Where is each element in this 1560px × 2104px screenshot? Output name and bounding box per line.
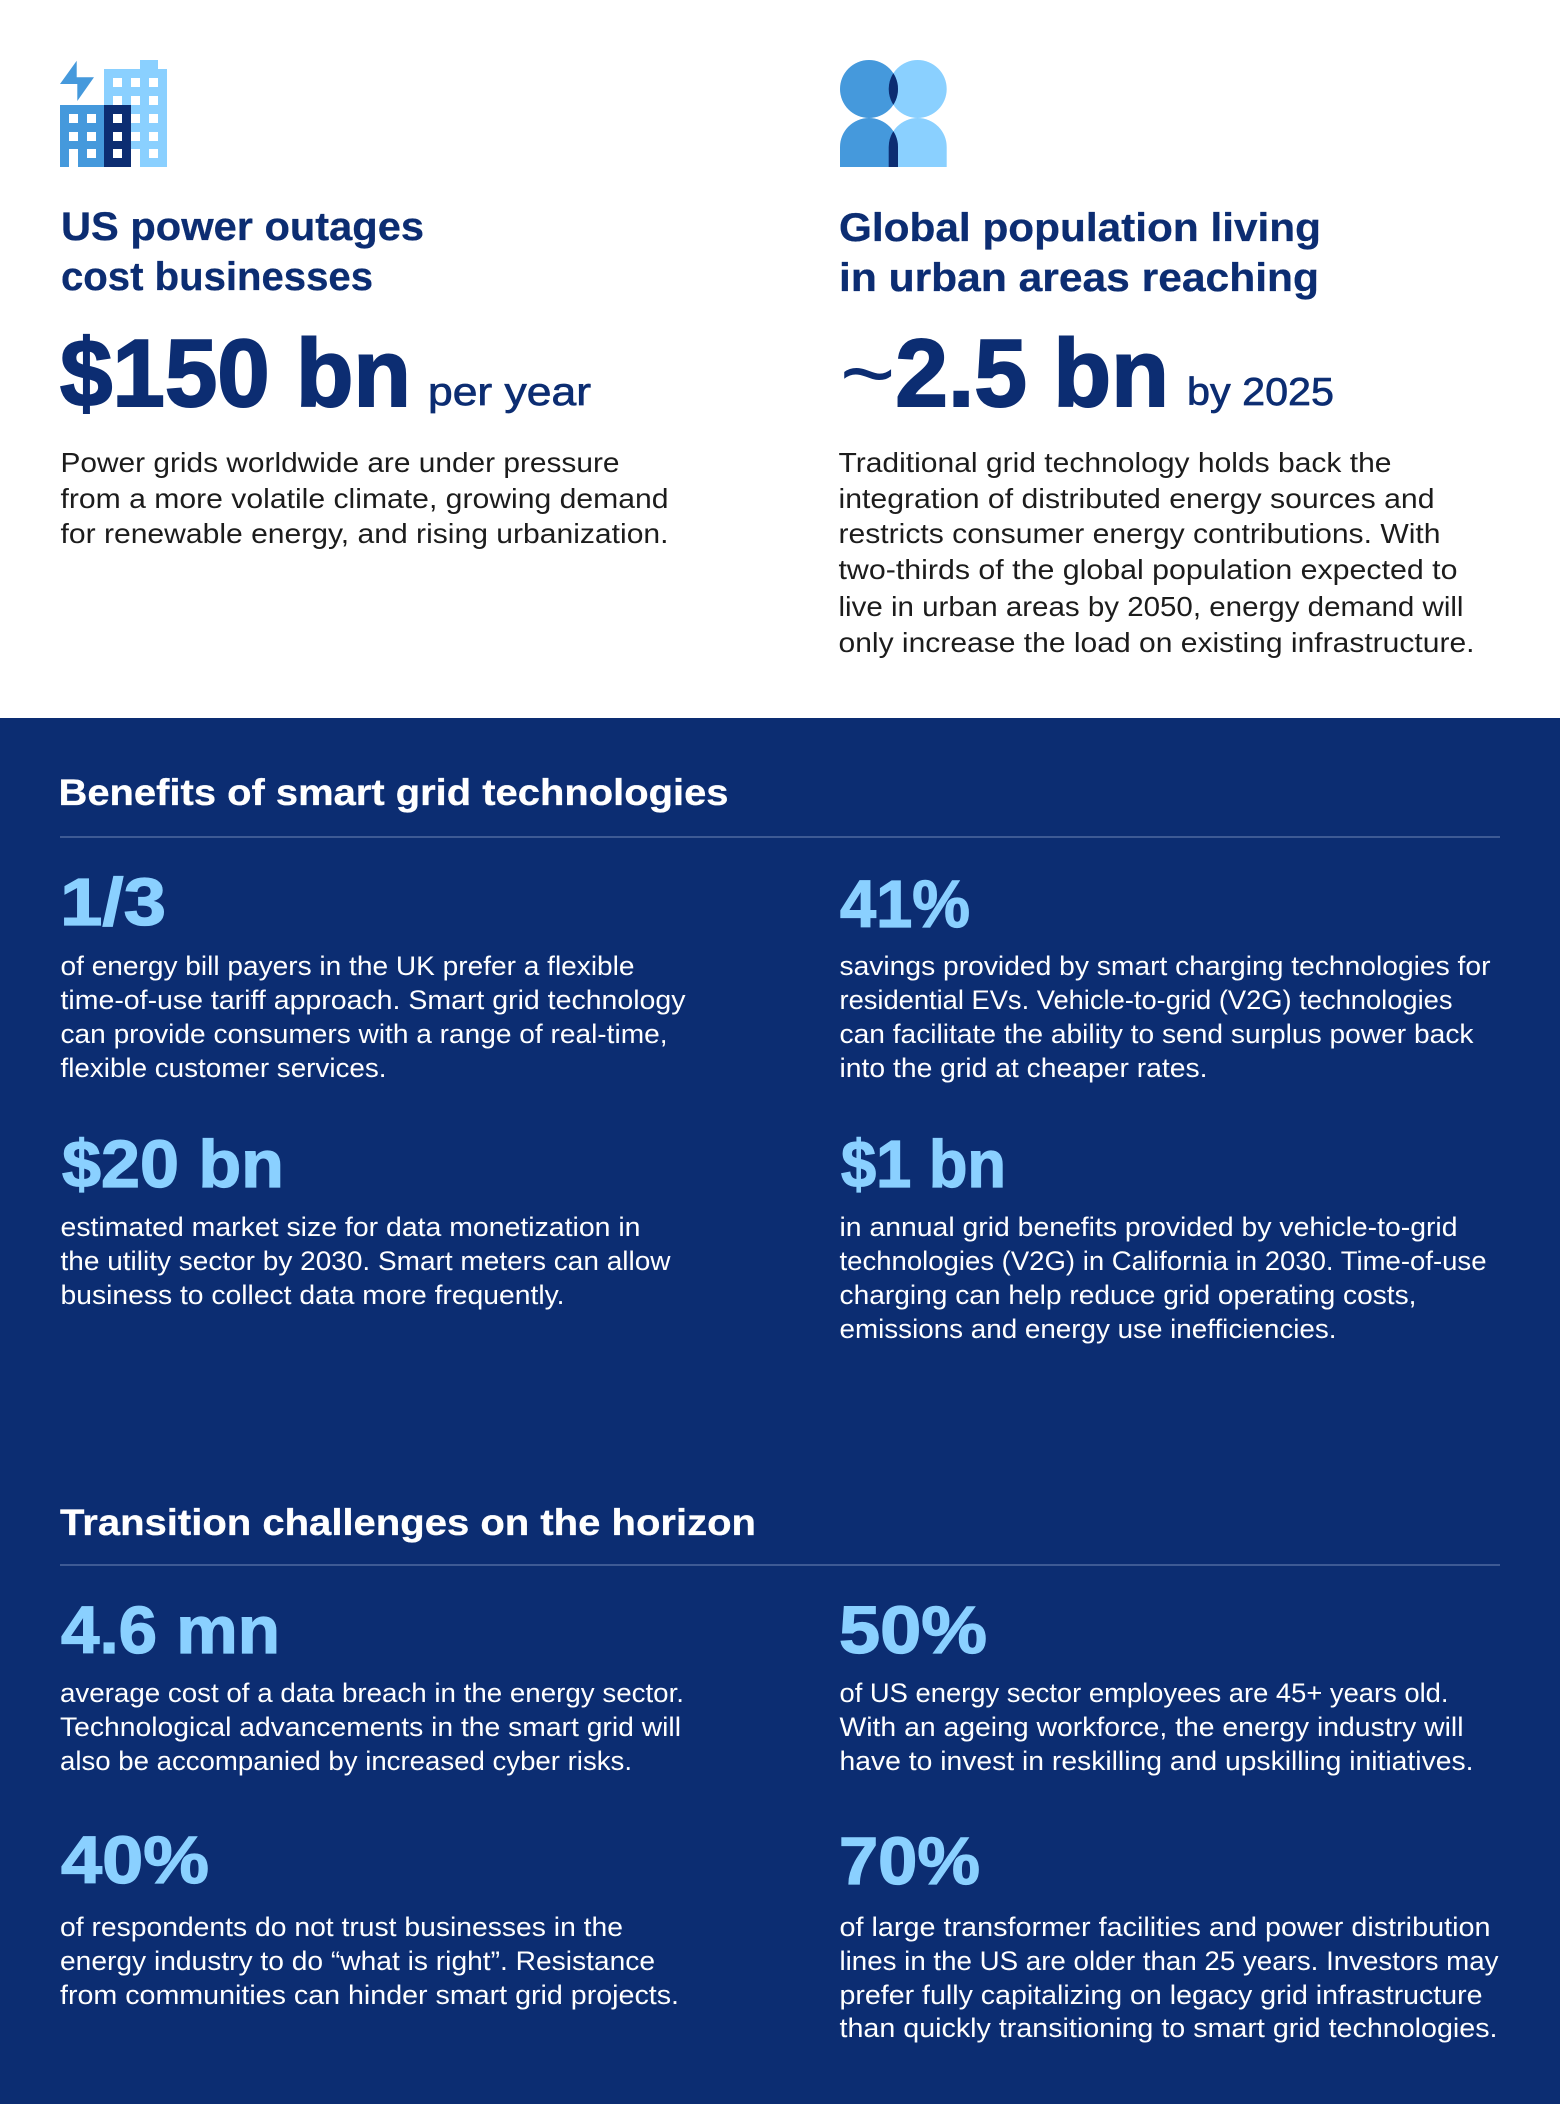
stat: 41%: savings provided by smart charging technologies for	[840, 951, 1491, 981]
stat: $20 bn: estimated market size for data monetization in	[60, 1212, 640, 1242]
heading: US power outages	[61, 205, 424, 249]
stat: $1 bn	[840, 1127, 1486, 1344]
stat: 50%: With an ageing workforce, the energy industry will	[840, 1712, 1464, 1742]
section heading: Benefits of smart grid technologies	[58, 771, 728, 813]
text block	[60, 447, 668, 549]
stat: ~2.5 bn by 2025	[840, 320, 1334, 427]
stat: $1 bn: technologies (V2G) in California in 2030. Time-of-use	[840, 1246, 1486, 1276]
heading: Global population living	[839, 206, 1321, 250]
stat: 70%: prefer fully capitalizing on legacy grid infrastructure	[840, 1980, 1482, 2010]
stat: 40%: 40%	[61, 1823, 209, 1898]
stat: 41%: residential EVs. Vehicle-to-grid (V2G) technologies	[840, 985, 1452, 1015]
stat: 41%: 41%	[840, 867, 970, 942]
text block: Traditional grid technology holds back the	[838, 447, 1392, 478]
stat: 70%: 70%	[839, 1824, 980, 1899]
stat: 70%	[839, 1824, 1499, 2043]
stat: $1 bn: in annual grid benefits provided by vehicle-to-grid	[840, 1212, 1458, 1242]
stat: 70%: lines in the US are older than 25 years. Investors may	[840, 1946, 1499, 1976]
stat: ~2.5 bn by 2025: by 2025	[1187, 371, 1334, 414]
stat: 4.6 mn: 4.6 mn	[61, 1593, 280, 1668]
stat: 4.6 mn	[60, 1593, 684, 1776]
stat: 1/3: of energy bill payers in the UK prefer a flexible	[60, 951, 634, 981]
stat: 50%: have to invest in reskilling and upskilling initiatives.	[840, 1746, 1474, 1776]
stat: 50%: of US energy sector employees are 45+ years old.	[840, 1678, 1448, 1708]
text block: from a more volatile climate, growing demand	[60, 483, 668, 514]
heading: in urban areas reaching	[839, 256, 1319, 300]
stat: 70%: of large transformer facilities and power distribution	[840, 1912, 1490, 1942]
stat: 1/3	[60, 865, 686, 1083]
stat: $1 bn: emissions and energy use inefficiencies.	[840, 1314, 1336, 1344]
panel: dark background	[0, 718, 1560, 2104]
icon: buildings with lightning bolt	[60, 60, 167, 167]
stat: 40%: of respondents do not trust businesses in the	[60, 1912, 623, 1942]
stat: $150 bn per year	[60, 320, 591, 427]
heading	[839, 206, 1321, 300]
text block: restricts consumer energy contributions. With	[838, 518, 1440, 549]
stat: 4.6 mn: also be accompanied by increased cyber risks.	[60, 1746, 632, 1776]
stat: $150 bn per year: $150 bn	[60, 320, 411, 427]
stat: 50%	[839, 1593, 1474, 1776]
heading	[61, 205, 424, 299]
stat: 1/3: flexible customer services.	[60, 1053, 386, 1083]
stat: 1/3: 1/3	[60, 865, 166, 940]
stat: 41%: into the grid at cheaper rates.	[840, 1053, 1208, 1083]
section heading: Transition challenges on the horizon	[60, 1501, 756, 1543]
panel: benefits of smart grid technologies	[58, 771, 1500, 1344]
stat: 4.6 mn: average cost of a data breach in the energy sector.	[60, 1678, 684, 1708]
heading: cost businesses	[61, 255, 373, 299]
panel: US power outages	[60, 60, 668, 549]
stat: 1/3: can provide consumers with a range of real-time,	[60, 1019, 668, 1049]
stat: 41%: can facilitate the ability to send surplus power back	[840, 1019, 1474, 1049]
stat: 50%: 50%	[839, 1593, 987, 1668]
stat: 40%: energy industry to do “what is right”. Resistance	[60, 1946, 655, 1976]
stat: $20 bn	[60, 1127, 671, 1310]
text block: for renewable energy, and rising urbanization.	[60, 518, 668, 549]
text block: two-thirds of the global population expected to	[838, 554, 1458, 585]
stat: $1 bn: $1 bn	[841, 1127, 1006, 1202]
panel: transition challenges on the horizon	[60, 1501, 1500, 2043]
stat: $20 bn: $20 bn	[62, 1127, 284, 1202]
icon: two overlapping people	[840, 60, 947, 167]
stat: $20 bn: business to collect data more frequently.	[60, 1280, 564, 1310]
text block: live in urban areas by 2050, energy demand will	[838, 591, 1464, 622]
text block: only increase the load on existing infrastructure.	[838, 627, 1474, 658]
stat: 4.6 mn: Technological advancements in the smart grid will	[60, 1712, 681, 1742]
stat: $1 bn: charging can help reduce grid operating costs,	[840, 1280, 1416, 1310]
stat: $20 bn: the utility sector by 2030. Smart meters can allow	[60, 1246, 671, 1276]
stat: 40%	[60, 1823, 679, 2010]
stat: ~2.5 bn by 2025: ~2.5 bn	[840, 320, 1169, 427]
stat: 1/3: time-of-use tariff approach. Smart grid technology	[60, 985, 686, 1015]
stat: 70%: than quickly transitioning to smart grid technologies.	[840, 2013, 1498, 2043]
text block: Power grids worldwide are under pressure	[60, 447, 620, 478]
panel: global urban population	[838, 60, 1474, 658]
text block: integration of distributed energy sources and	[838, 483, 1434, 514]
stat: $150 bn per year: per year	[428, 371, 591, 414]
text block	[838, 447, 1474, 658]
stat: 41%	[840, 867, 1491, 1083]
stat: 40%: from communities can hinder smart grid projects.	[60, 1980, 679, 2010]
